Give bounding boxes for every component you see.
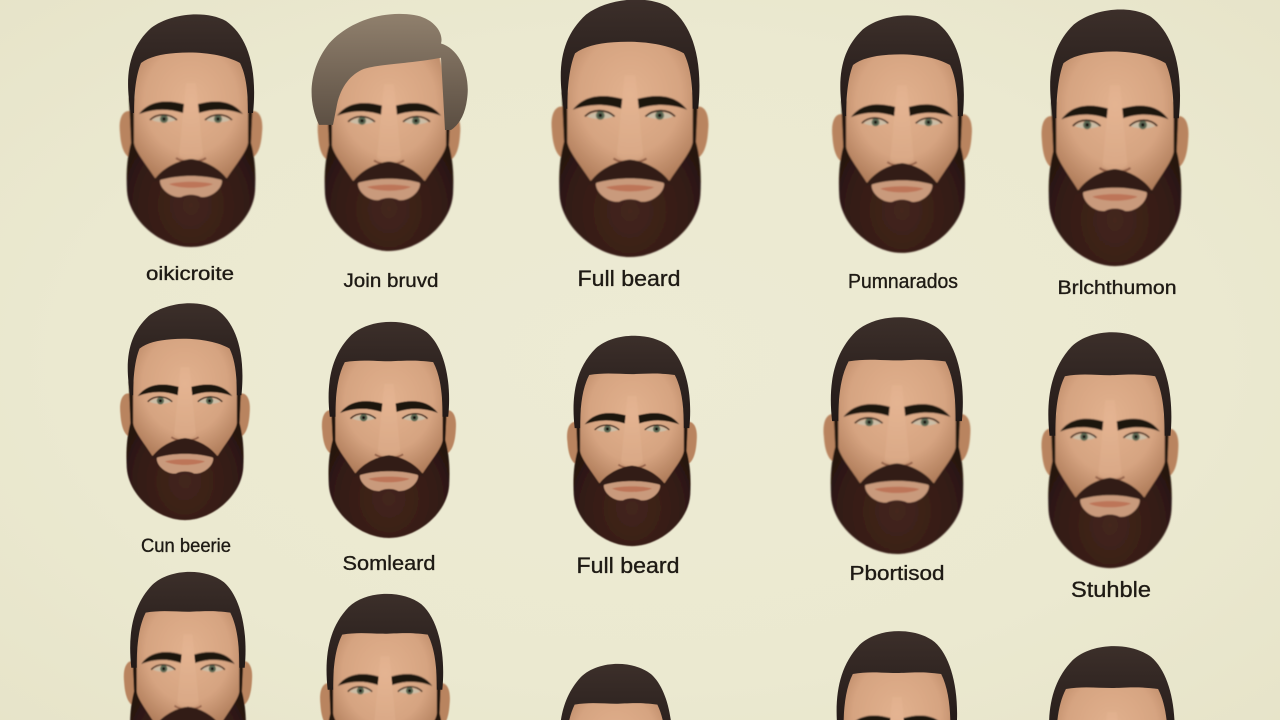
portrait: row 2 column 2 bbox=[322, 322, 456, 538]
label: row 1 column 2: Join bruvd bbox=[344, 271, 438, 292]
portrait: row 3 column 5 bbox=[1049, 646, 1174, 720]
portrait: row 2 column 4 bbox=[824, 317, 970, 554]
label: row 2 column 3: Full beard bbox=[576, 553, 680, 578]
portrait: row 1 column 4 bbox=[832, 15, 972, 253]
portrait: row 1 column 3 bbox=[550, 0, 710, 258]
label: row 2 column 4: Pbortisod bbox=[850, 563, 944, 585]
portrait: row 3 column 2 bbox=[320, 594, 450, 720]
portrait: row 3 column 1 bbox=[123, 572, 253, 720]
portrait: row 1 column 2 with grey swept hair bbox=[312, 14, 468, 251]
portrait: row 1 column 5 bbox=[1042, 10, 1188, 266]
label: row 2 column 1: Cun beerie bbox=[141, 536, 231, 557]
portrait: row 2 column 3 bbox=[567, 336, 697, 546]
portrait: row 3 column 3 bbox=[560, 664, 671, 720]
portrait: row 1 column 1 bbox=[120, 14, 262, 247]
label: row 1 column 5: Brlchthumon bbox=[1058, 278, 1176, 299]
label: row 2 column 2: Somleard bbox=[342, 553, 436, 575]
portrait: row 3 column 4 bbox=[836, 631, 958, 720]
portrait: row 2 column 5 bbox=[1042, 332, 1178, 568]
label: row 1 column 4: Pumnarados bbox=[848, 271, 958, 293]
portrait: row 2 column 1 bbox=[120, 303, 250, 520]
label: row 2 column 5: Stuhble bbox=[1071, 577, 1151, 602]
label: row 1 column 1: oikicroite bbox=[146, 264, 234, 285]
label: row 1 column 3: Full beard bbox=[578, 266, 680, 291]
